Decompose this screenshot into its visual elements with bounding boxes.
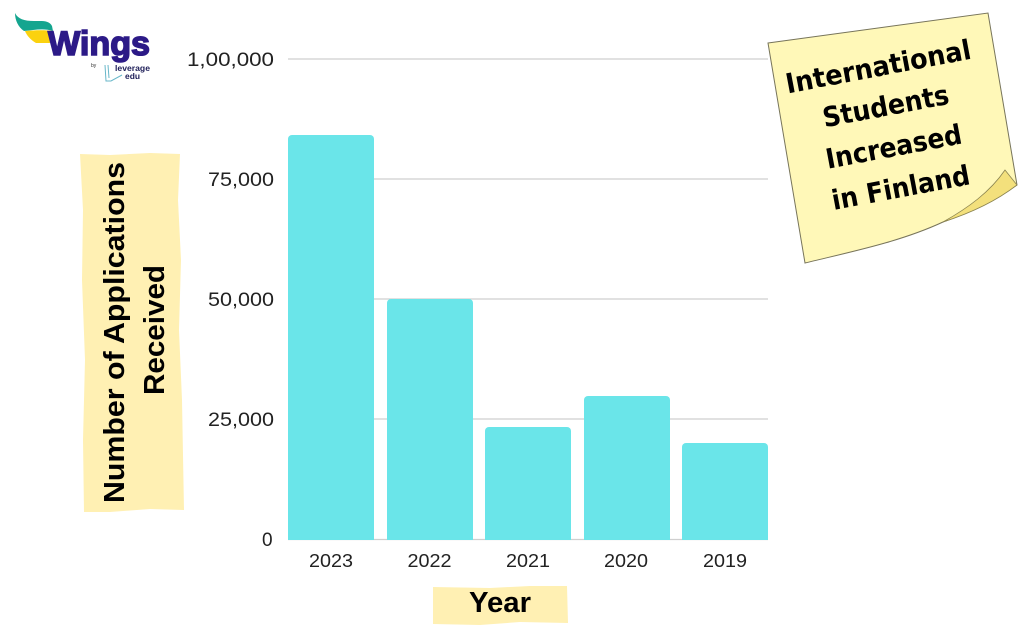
x axis tick labels: 2021 <box>506 550 550 571</box>
y axis tick labels: 1,00,000 <box>187 50 274 71</box>
icon: logo wing yellow <box>25 30 53 43</box>
icon: logo wing teal <box>15 13 53 31</box>
x axis title background <box>433 586 568 625</box>
bar 2019 <box>682 443 768 540</box>
sticky note title: Students <box>820 79 952 134</box>
sticky note fold <box>943 170 1017 222</box>
y axis title <box>80 153 184 512</box>
x axis tick labels <box>309 550 747 571</box>
bar 2023 <box>288 135 374 540</box>
sticky note title: in Finland <box>829 159 973 217</box>
logo edu text: edu <box>125 71 140 81</box>
logo leverage text: leverage <box>115 63 150 73</box>
bar 2022 <box>387 299 473 540</box>
bar 2020 <box>584 396 670 540</box>
sticky note paper <box>768 13 1017 263</box>
y axis title line 2: Received <box>139 265 171 395</box>
logo: Wings by leverage edu <box>15 13 150 81</box>
bar chart <box>288 135 768 540</box>
x axis tick labels: 2020 <box>604 550 648 571</box>
x axis title <box>433 586 568 625</box>
bar 2021 <box>485 427 571 540</box>
sticky note callout <box>768 13 1017 263</box>
x axis tick labels: 2019 <box>703 550 747 571</box>
y axis tick labels: 75,000 <box>208 170 274 191</box>
sticky note title: Increased <box>823 119 965 176</box>
sticky note title <box>783 34 974 217</box>
y axis tick labels: 25,000 <box>208 410 274 431</box>
y axis tick labels: 0 <box>262 530 273 551</box>
y axis tick labels <box>187 50 274 551</box>
x axis tick labels: 2023 <box>309 550 353 571</box>
y axis title line 1: Number of Applications <box>99 162 131 503</box>
logo wordmark: Wings <box>48 25 150 63</box>
logo by text: by <box>91 63 97 69</box>
y axis title background <box>80 153 184 512</box>
x axis title text: Year <box>469 587 531 619</box>
y axis tick labels: 50,000 <box>208 290 274 311</box>
gridlines <box>288 59 768 540</box>
x axis tick labels: 2022 <box>408 550 452 571</box>
sticky note title: International <box>783 34 974 100</box>
icon: leverage edu book <box>105 65 122 81</box>
